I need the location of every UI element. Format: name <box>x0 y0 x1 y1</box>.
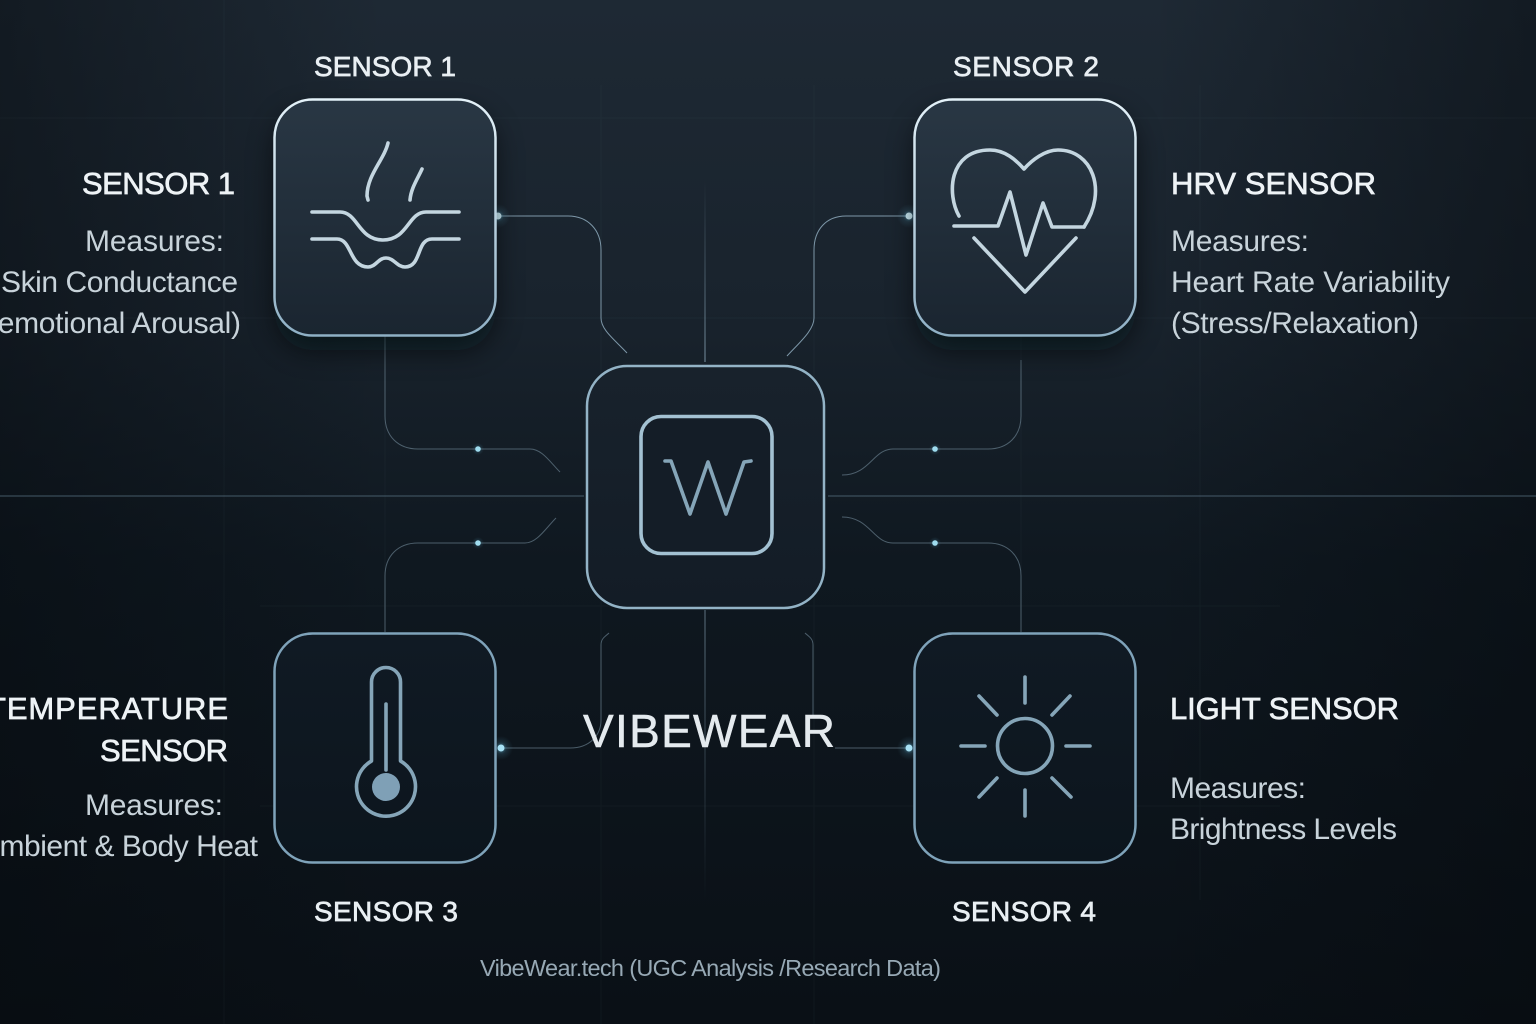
icon: W logo <box>641 416 772 554</box>
panel: sensor 4 light <box>914 634 1136 862</box>
text block: light sensor details: Brightness Levels <box>1170 813 1397 846</box>
heading: sensor 2 label: SENSOR 2 <box>953 51 1099 82</box>
text block: HRV sensor details: Measures: <box>1171 225 1309 258</box>
panel: central VibeWear hub <box>587 366 824 608</box>
central axis lines <box>0 180 1536 900</box>
icon: thermometer <box>356 668 416 816</box>
icon: sun <box>961 677 1090 816</box>
panel: sensor 2 heart rate variability <box>914 100 1136 350</box>
text block: light sensor details: Measures: <box>1170 772 1306 805</box>
panel: sensor 3 temperature <box>274 634 496 862</box>
text block: sensor 1 details: Measures: <box>85 225 224 258</box>
title: VibeWear brand: VIBEWEAR <box>583 705 835 757</box>
text block: sensor 1 details: Skin Conductance <box>1 266 238 299</box>
heading: sensor 1 label: SENSOR 1 <box>314 51 456 82</box>
connector nodes <box>472 204 941 760</box>
footer source: VibeWear.tech (UGC Analysis /Research Data) <box>480 955 941 981</box>
text block: sensor 1 details: SENSOR 1 <box>82 166 235 201</box>
text block: HRV sensor details <box>1171 166 1450 340</box>
text block: HRV sensor details: (Stress/Relaxation) <box>1171 307 1419 340</box>
text block: light sensor details: LIGHT SENSOR <box>1170 691 1399 726</box>
heading: sensor 4 label: SENSOR 4 <box>952 896 1096 927</box>
text block: temperature sensor details: SENSOR <box>100 733 228 768</box>
text block: sensor 1 details <box>0 166 241 340</box>
text block: temperature sensor details: Measures: <box>85 789 223 822</box>
connector lines <box>385 216 1021 748</box>
text block: HRV sensor details: HRV SENSOR <box>1171 166 1376 201</box>
icon: skin and sweat <box>312 143 459 267</box>
icon: heart with pulse <box>952 150 1095 292</box>
text block: HRV sensor details: Heart Rate Variability <box>1171 266 1450 299</box>
text block: light sensor details <box>1170 691 1399 846</box>
panel: sensor 1 skin conductance <box>274 100 496 350</box>
text block: temperature sensor details <box>0 691 259 863</box>
heading: sensor 3 label: SENSOR 3 <box>314 896 458 927</box>
